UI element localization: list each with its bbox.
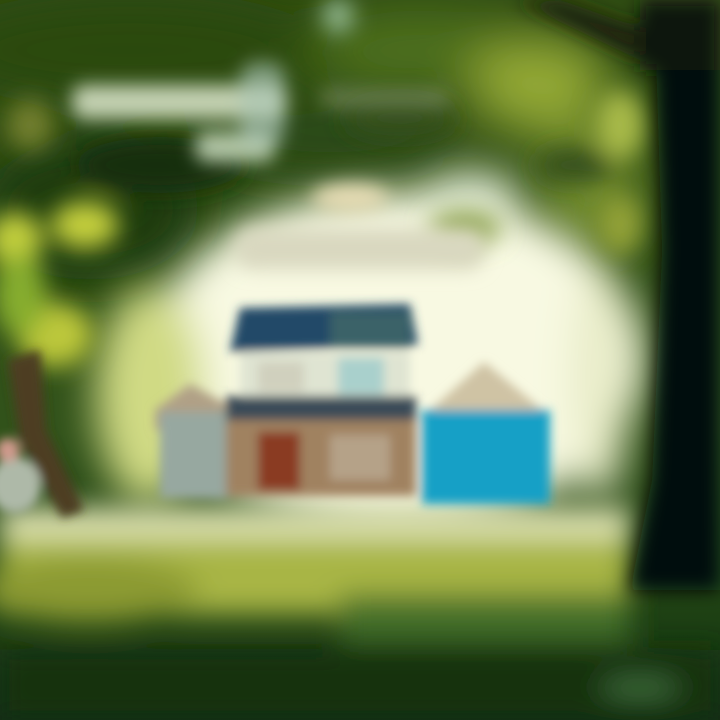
- foliage highlights and dark leaves: [0, 0, 645, 367]
- red door: [258, 432, 300, 490]
- left small house: [155, 384, 228, 498]
- glow: cream light behind the house: [95, 170, 645, 530]
- right tree trunk: [515, 0, 720, 590]
- left tree trunk: [0, 350, 84, 518]
- bright blue box: [422, 410, 550, 504]
- house: [155, 304, 550, 504]
- blurred heading text shapes: [72, 62, 450, 162]
- right blue box roof: [428, 362, 545, 412]
- grass: [0, 508, 720, 720]
- upper storey: [240, 352, 410, 400]
- dark blue roof: [230, 304, 418, 352]
- dark floor band: [226, 396, 416, 420]
- upper windows: [338, 358, 384, 394]
- window panel on wall: [330, 435, 390, 480]
- main house wall: [226, 418, 416, 496]
- blurred roof arc above the house: [235, 184, 485, 270]
